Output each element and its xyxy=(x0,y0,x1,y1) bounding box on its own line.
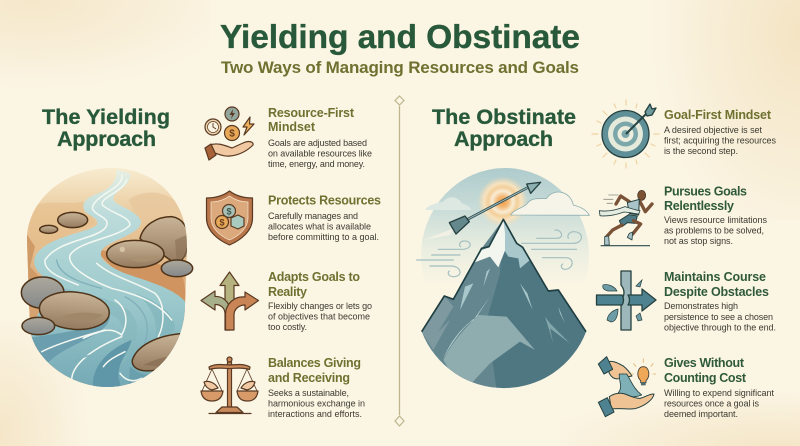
text: adapts goals to reality: Flexibly changes or lets go xyxy=(268,301,372,311)
rock small top xyxy=(40,225,58,233)
icon: runner and ribbon xyxy=(599,190,652,246)
icon: diverging arrows xyxy=(201,272,258,330)
text: balances giving and receiving: Seeks a sustainable, xyxy=(268,388,349,398)
text: protects resources xyxy=(268,194,381,242)
text: balances giving and receiving: Balances Giving xyxy=(268,356,361,370)
wind xyxy=(417,230,581,277)
icon: shield with coins: $ xyxy=(219,218,225,228)
subtitle: Two Ways of Managing Resources and Goals xyxy=(221,58,579,77)
text: adapts goals to reality: of objectives that become xyxy=(268,312,370,322)
sun xyxy=(478,177,528,227)
text: pursues goals relentlessly xyxy=(664,184,768,246)
text: pursues goals relentlessly: Views resource limitations xyxy=(664,215,768,225)
text: balances giving and receiving: and Receiving xyxy=(268,371,350,385)
icon: balance scale with hands xyxy=(201,357,258,414)
text: goal-first mindset: Goal-First Mindset xyxy=(664,108,772,122)
text: maintains course despite obstacles: Despite Obstacles xyxy=(664,285,769,299)
text: resource-first mindset: Mindset xyxy=(268,120,316,134)
text: resource-first mindset xyxy=(268,106,372,169)
text: adapts goals to reality: too costly. xyxy=(268,322,307,332)
text: protects resources: allocates what is available xyxy=(268,222,371,232)
text: protects resources: Protects Resources xyxy=(268,194,381,208)
text: maintains course despite obstacles: Demonstrates high xyxy=(664,301,738,311)
heading: the yielding approach: The Yielding xyxy=(42,105,170,129)
text: goal-first mindset: A desired objective is set xyxy=(664,125,762,135)
icon: coins clock and hand: $ xyxy=(229,128,235,140)
rock grey left xyxy=(21,277,64,308)
icon: giving hands and light bulb xyxy=(598,357,656,417)
heading: the obstinate approach xyxy=(432,105,576,151)
icon: coins clock and hand xyxy=(205,107,254,160)
text: balances giving and receiving: harmonious exchange in xyxy=(268,398,365,408)
title: Yielding and Obstinate xyxy=(220,19,580,56)
text: resource-first mindset: Resource-First xyxy=(268,106,355,120)
center divider xyxy=(395,96,404,426)
text: resource-first mindset: on available resources like xyxy=(268,148,372,158)
cloud right xyxy=(511,192,589,215)
text: protects resources: Carefully manages and xyxy=(268,211,358,221)
sky xyxy=(421,168,589,344)
text: goal-first mindset xyxy=(664,108,776,156)
text: gives without counting cost: Gives Without xyxy=(664,356,745,370)
text: gives without counting cost: Willing to expend significant xyxy=(664,388,774,398)
text: protects resources: before committing to a goal. xyxy=(268,232,379,242)
mountain xyxy=(420,219,587,390)
text: maintains course despite obstacles: persistence to see a chosen xyxy=(664,312,773,322)
rock top right xyxy=(140,217,188,263)
text: balances giving and receiving xyxy=(268,356,365,419)
text: adapts goals to reality xyxy=(268,270,372,332)
rock big xyxy=(38,289,111,332)
text: adapts goals to reality: Adapts Goals to xyxy=(268,270,360,284)
text: pursues goals relentlessly: Pursues Goals xyxy=(664,184,747,198)
text: pursues goals relentlessly: not as stop signs. xyxy=(664,236,733,246)
heading: the yielding approach: Approach xyxy=(57,127,156,151)
arrow xyxy=(449,182,541,234)
text: goal-first mindset: first; acquiring the resources xyxy=(664,136,776,146)
text: gives without counting cost xyxy=(664,356,774,419)
icon: shield with coins xyxy=(206,191,252,245)
text: maintains course despite obstacles: Maintains Course xyxy=(664,270,766,284)
text: pursues goals relentlessly: as problems to be solved, xyxy=(664,226,764,236)
snow xyxy=(503,219,530,268)
text: maintains course despite obstacles xyxy=(664,270,776,332)
water xyxy=(28,169,190,390)
ripples xyxy=(42,175,172,381)
icon: shield with coins: $ xyxy=(226,206,232,216)
rock grey small xyxy=(161,260,193,277)
icon: target with arrow xyxy=(592,100,659,168)
text: adapts goals to reality: Reality xyxy=(268,285,307,299)
text: balances giving and receiving: interactions and efforts. xyxy=(268,409,362,419)
text: pursues goals relentlessly: Relentlessly xyxy=(664,199,734,213)
text: goal-first mindset: is the second step. xyxy=(664,146,738,156)
rock bottom right xyxy=(132,332,180,372)
rock lower left xyxy=(22,317,55,335)
text: gives without counting cost: resources once a goal is xyxy=(664,398,760,408)
rock middle xyxy=(107,240,164,268)
text: maintains course despite obstacles: objective through to the end. xyxy=(664,322,776,332)
heading: the obstinate approach: The Obstinate xyxy=(432,105,576,129)
text: resource-first mindset: Goals are adjusted based xyxy=(268,138,367,148)
text: resource-first mindset: time, energy, and money. xyxy=(268,159,365,169)
illustration: mountain and arrow xyxy=(417,168,589,390)
icon: arrow through barrier xyxy=(596,271,656,330)
cloud left xyxy=(425,197,472,210)
light streak xyxy=(423,228,453,240)
text: gives without counting cost: deemed important. xyxy=(664,409,738,419)
heading: the obstinate approach: Approach xyxy=(454,127,553,151)
text: gives without counting cost: Counting Cost xyxy=(664,371,747,385)
illustration: river and rocks xyxy=(20,160,195,395)
heading: the yielding approach xyxy=(42,105,170,151)
rock top left xyxy=(58,212,88,228)
outline xyxy=(422,219,586,332)
